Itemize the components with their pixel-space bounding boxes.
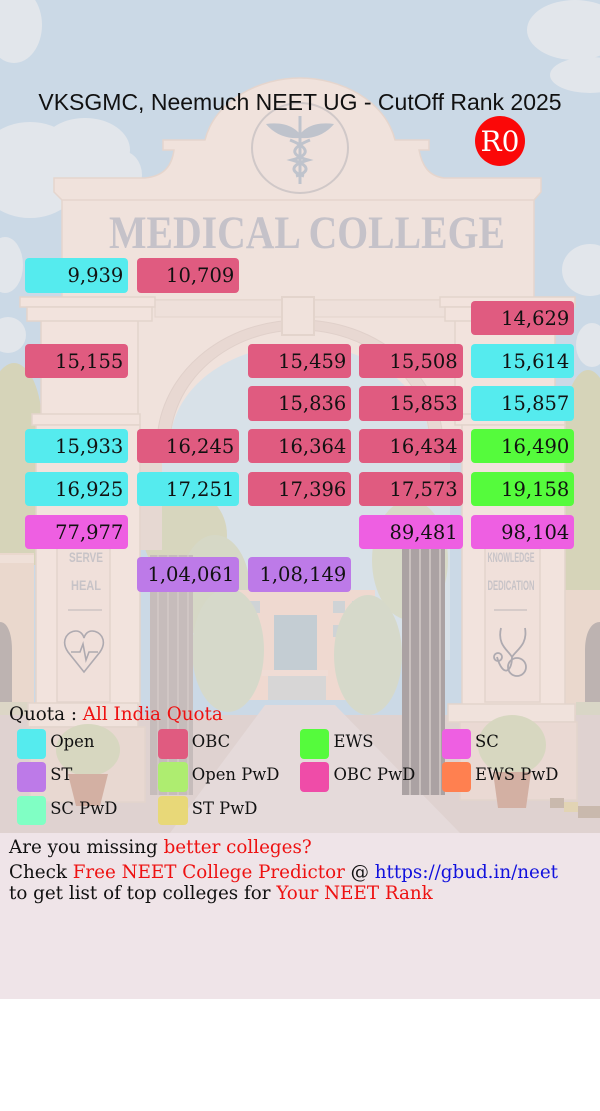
promo: college predictor link: Check Free NEET College Predictor @ https://gbud.in/neet bbox=[9, 862, 558, 883]
rank 15,155 OBC: 15,155 bbox=[55, 350, 123, 373]
legend item: Open bbox=[17, 729, 94, 759]
trees left and right bbox=[0, 363, 600, 590]
quota heading: Quota : All India Quota bbox=[9, 704, 223, 725]
rank 98,104 SC: 98,104 bbox=[501, 520, 569, 544]
legend item: Open PwD: Open PwD bbox=[192, 765, 279, 784]
rank 16,364 OBC bbox=[248, 429, 351, 463]
rank 16,245 OBC bbox=[137, 429, 239, 463]
rank 9,939 open: 9,939 bbox=[67, 264, 123, 287]
legend item: ST PwD: ST PwD bbox=[192, 799, 257, 818]
pillar inscriptions and icons: DEDICATION bbox=[488, 577, 534, 593]
rank 15,853 OBC bbox=[359, 386, 463, 421]
rank 15,857 open bbox=[471, 386, 574, 421]
rank 15,459 OBC: 15,459 bbox=[278, 350, 346, 373]
legend item: OBC PwD bbox=[300, 762, 415, 792]
rank 10,709 OBC bbox=[137, 258, 239, 293]
rank 16,925 open bbox=[25, 472, 128, 506]
legend item: OBC: OBC bbox=[192, 732, 230, 751]
top pediment with arch bbox=[54, 78, 541, 300]
promo: top colleges for your rank: to get list of top colleges for Your NEET Rank bbox=[9, 883, 433, 904]
rank 17,396 OBC bbox=[248, 472, 351, 506]
rank 16,925 open: 16,925 bbox=[55, 478, 123, 501]
promo: missing better colleges: Are you missing better colleges? bbox=[9, 837, 312, 858]
rank 17,251 open: 17,251 bbox=[166, 478, 234, 501]
title: VKSGMC, Neemuch NEET UG - CutOff Rank 2025 bbox=[38, 89, 562, 115]
rank 15,508 OBC: 15,508 bbox=[389, 350, 458, 373]
rank 15,836 OBC bbox=[248, 386, 351, 421]
cutoff rank grid bbox=[25, 258, 574, 592]
rank 15,853 OBC: 15,853 bbox=[389, 392, 458, 415]
rank 89,481 SC: 89,481 bbox=[389, 520, 458, 544]
potted plants bbox=[56, 715, 546, 808]
pillar inscriptions and icons: HEAL bbox=[71, 577, 101, 593]
rank 77,977 SC bbox=[25, 514, 128, 549]
legend item: ST bbox=[17, 762, 72, 792]
rank 15,508 OBC bbox=[359, 344, 463, 378]
legend item: SC: SC bbox=[475, 732, 499, 751]
rank 77,977 SC: 77,977 bbox=[55, 520, 123, 544]
rank 1,04,061 ST: 1,04,061 bbox=[147, 563, 234, 586]
legend item: ST PwD bbox=[158, 796, 257, 825]
rank 15,933 open: 15,933 bbox=[55, 435, 123, 458]
gates bbox=[137, 450, 445, 795]
round badge R0 bbox=[475, 116, 525, 166]
rank 1,04,061 ST bbox=[137, 557, 239, 592]
legend item: EWS bbox=[300, 729, 374, 759]
rank 16,490 EWS: 16,490 bbox=[501, 435, 569, 458]
legend item: EWS PwD bbox=[442, 762, 558, 792]
rank 14,629 OBC bbox=[471, 301, 574, 335]
rank 16,434 OBC: 16,434 bbox=[389, 435, 458, 458]
rank 17,396 OBC: 17,396 bbox=[278, 478, 346, 501]
rank 15,614 open: 15,614 bbox=[501, 350, 569, 373]
legend item: ST: ST bbox=[50, 765, 72, 784]
legend item: OBC bbox=[158, 729, 230, 759]
striped curb bbox=[550, 798, 600, 818]
legend item: SC PwD bbox=[17, 796, 117, 825]
rank 1,08,149 ST bbox=[248, 557, 351, 592]
rank 17,573 OBC bbox=[359, 472, 463, 506]
legend bbox=[17, 729, 558, 825]
pillar inscriptions and icons: SERVE bbox=[69, 549, 103, 565]
rank 15,614 open bbox=[471, 344, 574, 378]
rank 98,104 SC bbox=[471, 514, 574, 549]
rank 16,490 EWS bbox=[471, 429, 574, 463]
legend item: Open: Open bbox=[50, 732, 94, 751]
legend item: OBC PwD: OBC PwD bbox=[334, 765, 415, 784]
rank 9,939 open bbox=[25, 258, 128, 293]
rank 19,158 EWS: 19,158 bbox=[501, 478, 569, 501]
rank 19,158 EWS bbox=[471, 472, 574, 506]
arch bbox=[137, 297, 463, 460]
legend item: EWS: EWS bbox=[334, 732, 374, 751]
rank 1,08,149 ST: 1,08,149 bbox=[259, 563, 346, 586]
left and right pillars bbox=[20, 297, 577, 802]
rank 15,155 OBC bbox=[25, 344, 128, 378]
rank 16,364 OBC: 16,364 bbox=[278, 435, 346, 458]
rank 16,434 OBC bbox=[359, 429, 463, 463]
building name lettering: MEDICAL COLLEGE bbox=[109, 207, 505, 259]
rank 15,836 OBC: 15,836 bbox=[278, 392, 346, 415]
legend item: SC PwD: SC PwD bbox=[50, 799, 117, 818]
legend item: SC bbox=[442, 729, 499, 759]
bottom panel backdrop bbox=[0, 833, 600, 999]
rank 17,251 open bbox=[137, 472, 239, 506]
rank 16,245 OBC: 16,245 bbox=[166, 435, 234, 458]
rank 14,629 OBC: 14,629 bbox=[501, 307, 569, 330]
pillar inscriptions and icons: KNOWLEDGE bbox=[488, 549, 534, 565]
side buildings bbox=[0, 553, 600, 802]
legend item: Open PwD bbox=[158, 762, 279, 792]
pillar inscriptions and icons bbox=[65, 549, 535, 676]
rank 89,481 SC bbox=[359, 514, 463, 549]
rank 17,573 OBC: 17,573 bbox=[389, 478, 458, 501]
rank 15,933 open bbox=[25, 429, 128, 463]
round badge R0: R0 bbox=[481, 125, 519, 158]
medallion with caduceus bbox=[252, 103, 348, 193]
inner sky, rear building and garden bbox=[0, 380, 600, 833]
legend item: EWS PwD: EWS PwD bbox=[475, 765, 558, 784]
rank 10,709 OBC: 10,709 bbox=[166, 264, 234, 287]
rank 15,459 OBC bbox=[248, 344, 351, 378]
rank 15,857 open: 15,857 bbox=[501, 392, 569, 415]
